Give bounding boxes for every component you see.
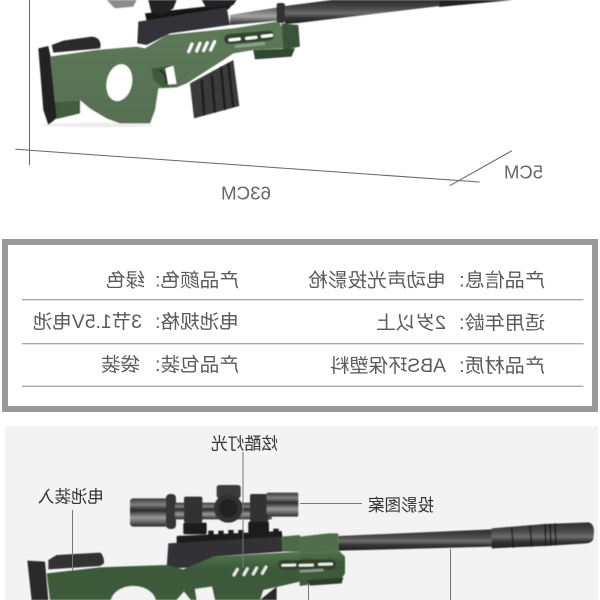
row 3 right: product material: 产品材质: xyxy=(459,355,545,377)
panel: dimension photo xyxy=(15,0,543,204)
row 2 left: battery spec: 3节1.5V电池 xyxy=(33,311,142,333)
panel: product specification table xyxy=(5,242,595,409)
row 3 left: product packaging xyxy=(101,354,239,376)
row 2 left: battery spec: 电池规格: xyxy=(155,311,239,333)
panel: feature callout photo xyxy=(5,426,598,600)
row 3 left: product packaging: 产品包装: xyxy=(155,354,239,376)
label: 63CM: 63CM xyxy=(221,184,271,204)
row 3 right: product material xyxy=(330,355,545,377)
row 3 right: product material: ABS环保塑料 xyxy=(330,355,446,377)
label: projection pattern: 投影图案 xyxy=(368,496,434,515)
icon: green rifle, bottom xyxy=(27,485,594,600)
row 2 left: battery spec xyxy=(33,311,239,333)
row 3 left: product packaging: 袋装 xyxy=(101,354,140,376)
row 1 right: product info xyxy=(308,270,545,292)
row 1 right: product info: 电动声光投影枪 xyxy=(308,270,446,292)
row 1 right: product info: 产品信息: xyxy=(459,270,545,292)
callout lines xyxy=(72,452,450,600)
icon: green rifle, top xyxy=(38,0,513,127)
width dimension line xyxy=(450,151,512,186)
row 1 left: product colour xyxy=(106,270,239,292)
row 2 right: suitable age: 2岁以上 xyxy=(376,312,446,334)
label: battery installation: 电池装入 xyxy=(38,488,104,506)
length dimension line xyxy=(15,149,480,182)
label: 5CM: 5CM xyxy=(504,162,543,182)
row 1 left: product colour: 产品颜色: xyxy=(155,270,239,292)
height dimension line xyxy=(28,0,30,165)
row 1 left: product colour: 绿色 xyxy=(106,270,145,292)
row 2 right: suitable age xyxy=(376,312,545,334)
label: cool light: 炫酷灯光 xyxy=(211,434,278,454)
row 2 right: suitable age: 适用年龄: xyxy=(459,312,545,334)
